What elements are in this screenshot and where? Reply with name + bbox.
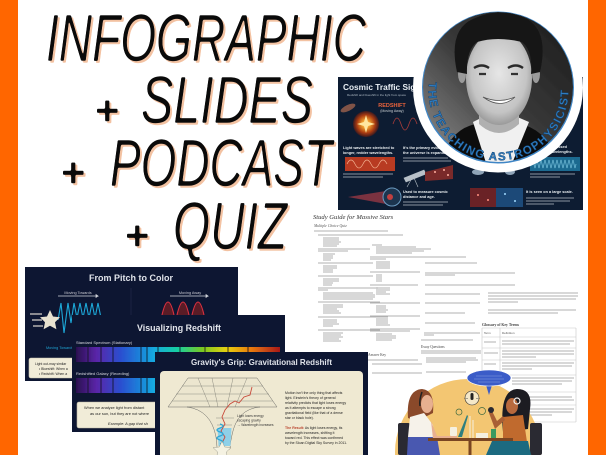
panel: from pitch to color slide xyxy=(25,267,238,381)
text block: explanation: star or black hole). xyxy=(285,416,314,420)
title: infographic + slides + podcast + quiz: QUIZ xyxy=(173,189,288,264)
text block: explanation xyxy=(285,391,347,445)
text block: cosmic distance: Used to measure cosmic xyxy=(403,190,448,194)
text block: compressed wavelengths: Light is compressed xyxy=(530,145,568,149)
short answer lines xyxy=(424,263,515,335)
text block: explanation: wavelength increases, shifting it xyxy=(285,431,334,435)
standard spectrum label: Standard Spectrum (Stationary) xyxy=(76,340,133,345)
blue waveform xyxy=(58,303,101,333)
text block: explanation: light. Einstein's theory of general xyxy=(285,396,336,400)
text block: explanation: relativity predicts that light loses energy xyxy=(285,401,346,405)
redshifted spectrum label: Redshifted Galaxy (Receding) xyxy=(76,371,130,376)
panel: cosmic traffic signals infographic: Redshift and blueshift in the light from space xyxy=(347,93,406,97)
icon: telescope xyxy=(404,170,426,187)
heading: study guide: Study Guide for Massive Stars xyxy=(313,214,394,221)
quiz text lines xyxy=(314,231,403,341)
panel: cosmic traffic signals infographic xyxy=(338,77,583,210)
text block: stretched light xyxy=(343,146,395,155)
diagram label: → Wavelength increases xyxy=(237,423,274,427)
icon: red star xyxy=(353,111,379,137)
glossary heading: Glossary of Key Terms xyxy=(482,323,520,327)
tablet and cups xyxy=(450,415,496,438)
orange right border xyxy=(588,0,606,455)
standard spectrum bar xyxy=(76,347,280,362)
text block: cosmic distance xyxy=(403,190,448,199)
red galaxies field xyxy=(425,165,453,181)
title: infographic + slides + podcast + quiz xyxy=(46,1,366,264)
red waveform xyxy=(162,302,204,315)
small check icons xyxy=(456,408,486,415)
galaxy thumbnails xyxy=(472,169,515,175)
red wave box xyxy=(345,157,395,171)
woman left xyxy=(407,389,457,455)
right document text xyxy=(488,293,578,313)
chair right xyxy=(530,423,542,455)
text block: compressed wavelengths: to shorter wavelengths. xyxy=(530,150,573,154)
cream panel xyxy=(160,371,363,455)
heading: From Pitch to Color xyxy=(89,273,173,284)
glossary table xyxy=(482,328,576,422)
illustration: podcast conversation xyxy=(390,370,550,455)
caption box: • Blueshift: When a xyxy=(39,367,68,371)
caption box: as our sun, but they are not where xyxy=(90,411,149,416)
caption box: When we analyze light from distant xyxy=(84,405,145,410)
panel: cosmic traffic signals infographic: (Moving Away) xyxy=(380,109,404,113)
panel: study guide document xyxy=(313,214,578,422)
icon: microphone xyxy=(465,391,479,405)
caption box xyxy=(29,358,234,378)
glossary table: Definition xyxy=(502,331,515,335)
photo portrait xyxy=(423,12,573,170)
woman right xyxy=(486,389,531,455)
title: infographic + slides + podcast + quiz: INFOGRAPHIC xyxy=(46,1,366,76)
galaxy decoration xyxy=(339,102,357,114)
text block: explanation: gravitational field (like that of a dense xyxy=(285,411,343,415)
text block: primary evidence: the universe is expanding. xyxy=(403,151,451,155)
panel: visualizing redshift slide xyxy=(72,315,285,432)
heading: cosmic traffic signals: Cosmic Traffic Signals xyxy=(343,82,432,92)
panel: gravitational redshift slide xyxy=(155,352,368,455)
caption box: • Redshift: When a xyxy=(39,372,67,376)
text block: explanation: as it attempts to escape a strong xyxy=(285,406,336,410)
text block: explanation: Motion isn't the only thing that affects xyxy=(285,391,343,395)
caption box: Example: A gap that sh xyxy=(108,421,148,426)
chair left xyxy=(398,423,410,455)
answer key heading: Answer Key xyxy=(368,353,386,357)
blue wave box xyxy=(530,157,580,171)
icon: star xyxy=(40,310,60,329)
glossary table: Term xyxy=(484,331,491,335)
arrow: moving towards: Moving Towards xyxy=(64,291,92,295)
icon: star xyxy=(213,441,231,455)
diagram: gravity well xyxy=(168,378,277,449)
text block: large scale: It is seen on a large scale. xyxy=(526,190,573,194)
circular text: THE TEACHING ASTROPHYSICIST xyxy=(428,82,569,161)
moving towards label: Moving Towards xyxy=(46,346,73,350)
caption box xyxy=(77,402,280,428)
orange left border xyxy=(0,0,18,455)
red wave xyxy=(393,118,417,130)
text block: stretched light: Light waves are stretched to xyxy=(343,146,395,150)
text block: stretched light: longer, redder wavelengths. xyxy=(343,151,393,155)
title: infographic + slides + podcast + quiz: + xyxy=(125,212,150,259)
icon: speech bubble xyxy=(467,370,511,395)
diagram label xyxy=(237,414,274,427)
text block: explanation: The Result: As light loses energy, its xyxy=(285,426,343,430)
arrow: moving away: Moving Away xyxy=(179,291,201,295)
badge: the teaching astrophysicist xyxy=(413,12,583,172)
text block: primary evidence xyxy=(403,146,456,155)
text block: primary evidence: It's the primary evidence that xyxy=(403,146,456,150)
heading: Gravity's Grip: Gravitational Redshift xyxy=(191,357,332,367)
quiz text lines, column two xyxy=(370,245,466,340)
red and blue galaxy field xyxy=(470,188,523,207)
title: infographic + slides + podcast + quiz: SLIDES xyxy=(141,63,313,138)
title: infographic + slides + podcast + quiz: + xyxy=(95,87,120,134)
yellow circle xyxy=(395,379,541,455)
icon: cosmic distance beam xyxy=(348,188,401,206)
text block: compressed wavelengths xyxy=(530,145,573,154)
redshifted spectrum bar xyxy=(76,378,280,393)
diagram label: Light loses energy xyxy=(237,414,264,418)
text block: explanation: toward red. This effect was confirmed xyxy=(285,436,343,440)
panel: study guide document: Multiple Choice Quiz xyxy=(313,224,347,228)
diagram label: escaping gravity xyxy=(237,418,261,422)
text block: explanation: by the Sloan Digital Sky Survey in 2011. xyxy=(285,441,347,445)
title: infographic + slides + podcast + quiz: PODCAST xyxy=(110,126,335,201)
arrow: moving towards xyxy=(58,291,98,297)
redshift label: REDSHIFT xyxy=(378,103,406,109)
title: infographic + slides + podcast + quiz: + xyxy=(61,149,86,196)
arrow: moving away xyxy=(170,291,208,297)
table xyxy=(428,438,513,455)
short answer heading: Essay Questions xyxy=(421,345,445,349)
text block: cosmic distance: distance and age. xyxy=(403,195,435,199)
heading: Visualizing Redshift xyxy=(137,323,222,334)
caption box: Light out-may similar xyxy=(35,362,67,366)
